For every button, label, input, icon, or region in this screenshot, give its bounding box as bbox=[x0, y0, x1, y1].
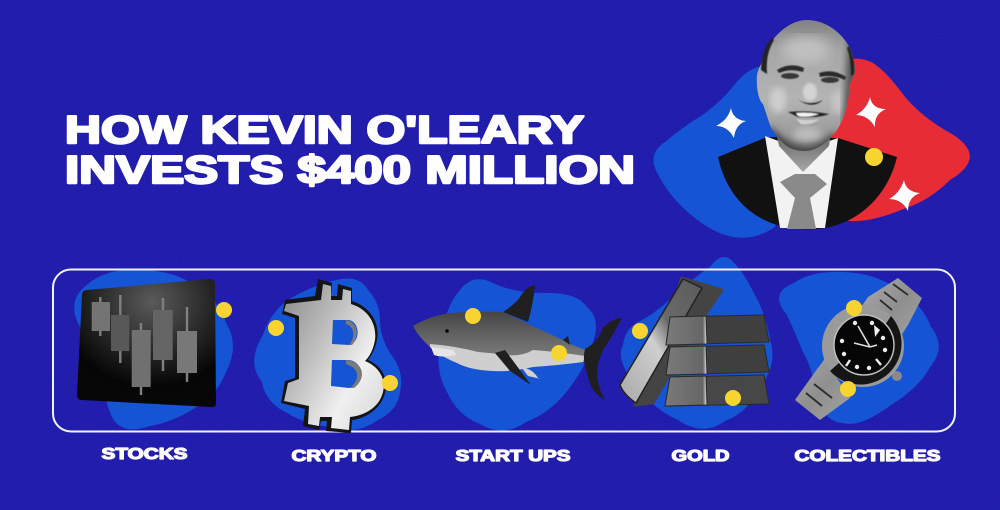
eyes and brows bbox=[777, 65, 846, 83]
blob: collectibles bbox=[779, 272, 939, 424]
sparkle left bbox=[716, 108, 746, 138]
blob: crypto bbox=[254, 278, 401, 430]
watch bracelet bbox=[795, 278, 922, 420]
bitcoin inner bevels bbox=[346, 320, 362, 388]
nose bbox=[797, 83, 823, 105]
blob: start ups bbox=[438, 279, 596, 431]
category labels bbox=[102, 446, 940, 465]
label: gold: GOLD bbox=[672, 448, 730, 465]
hair sides bbox=[761, 38, 854, 76]
shark lower fin bbox=[522, 368, 541, 379]
sparkle upper right bbox=[856, 97, 886, 127]
yellow dot bbox=[865, 148, 883, 166]
label: crypto: CRYPTO bbox=[292, 448, 376, 465]
shark teeth bbox=[431, 347, 456, 356]
label: start ups: START UPS bbox=[456, 448, 570, 465]
portrait group bbox=[654, 15, 970, 238]
bracelet links bbox=[806, 284, 908, 406]
stacked bars bbox=[665, 315, 769, 406]
sparkle lower right bbox=[889, 180, 920, 211]
label: stocks: STOCKS bbox=[102, 446, 188, 463]
head bbox=[756, 20, 855, 151]
shark eye bbox=[445, 329, 449, 333]
icon: gold bars bbox=[620, 278, 769, 406]
label: colectibles: COLECTIBLES bbox=[794, 448, 940, 465]
shark belly bbox=[430, 344, 585, 371]
icon: bitcoin symbol bbox=[281, 279, 386, 433]
watch bezel bbox=[822, 305, 904, 387]
neck bbox=[775, 125, 832, 172]
tie bbox=[780, 174, 827, 229]
red blob behind portrait bbox=[830, 59, 970, 221]
title bbox=[65, 109, 635, 192]
blob: gold bbox=[621, 257, 772, 429]
suit bbox=[718, 137, 897, 230]
icon: wristwatch bbox=[795, 278, 922, 420]
shark body bbox=[413, 312, 587, 371]
yellow dots bbox=[216, 300, 862, 406]
watch hands and markers bbox=[846, 325, 881, 366]
panel: blue blobs bbox=[74, 257, 939, 431]
shark tail and fins bbox=[495, 285, 622, 400]
blob: stocks bbox=[74, 270, 233, 429]
watch dial bbox=[834, 315, 894, 375]
icon: shark bbox=[413, 285, 622, 400]
shirt bbox=[765, 136, 838, 228]
leaning bar face bbox=[620, 279, 702, 403]
leaning bar side bbox=[635, 278, 722, 405]
head shading bbox=[782, 36, 830, 64]
title: INVESTS $400 MILLION bbox=[65, 149, 635, 192]
icon: candlestick chart card bbox=[77, 279, 216, 408]
title: HOW KEVIN O'LEARY bbox=[65, 109, 584, 152]
mouth bbox=[788, 111, 829, 124]
watch crown bbox=[892, 371, 902, 381]
panel outline bbox=[53, 270, 955, 432]
blue blob behind portrait bbox=[654, 66, 790, 238]
